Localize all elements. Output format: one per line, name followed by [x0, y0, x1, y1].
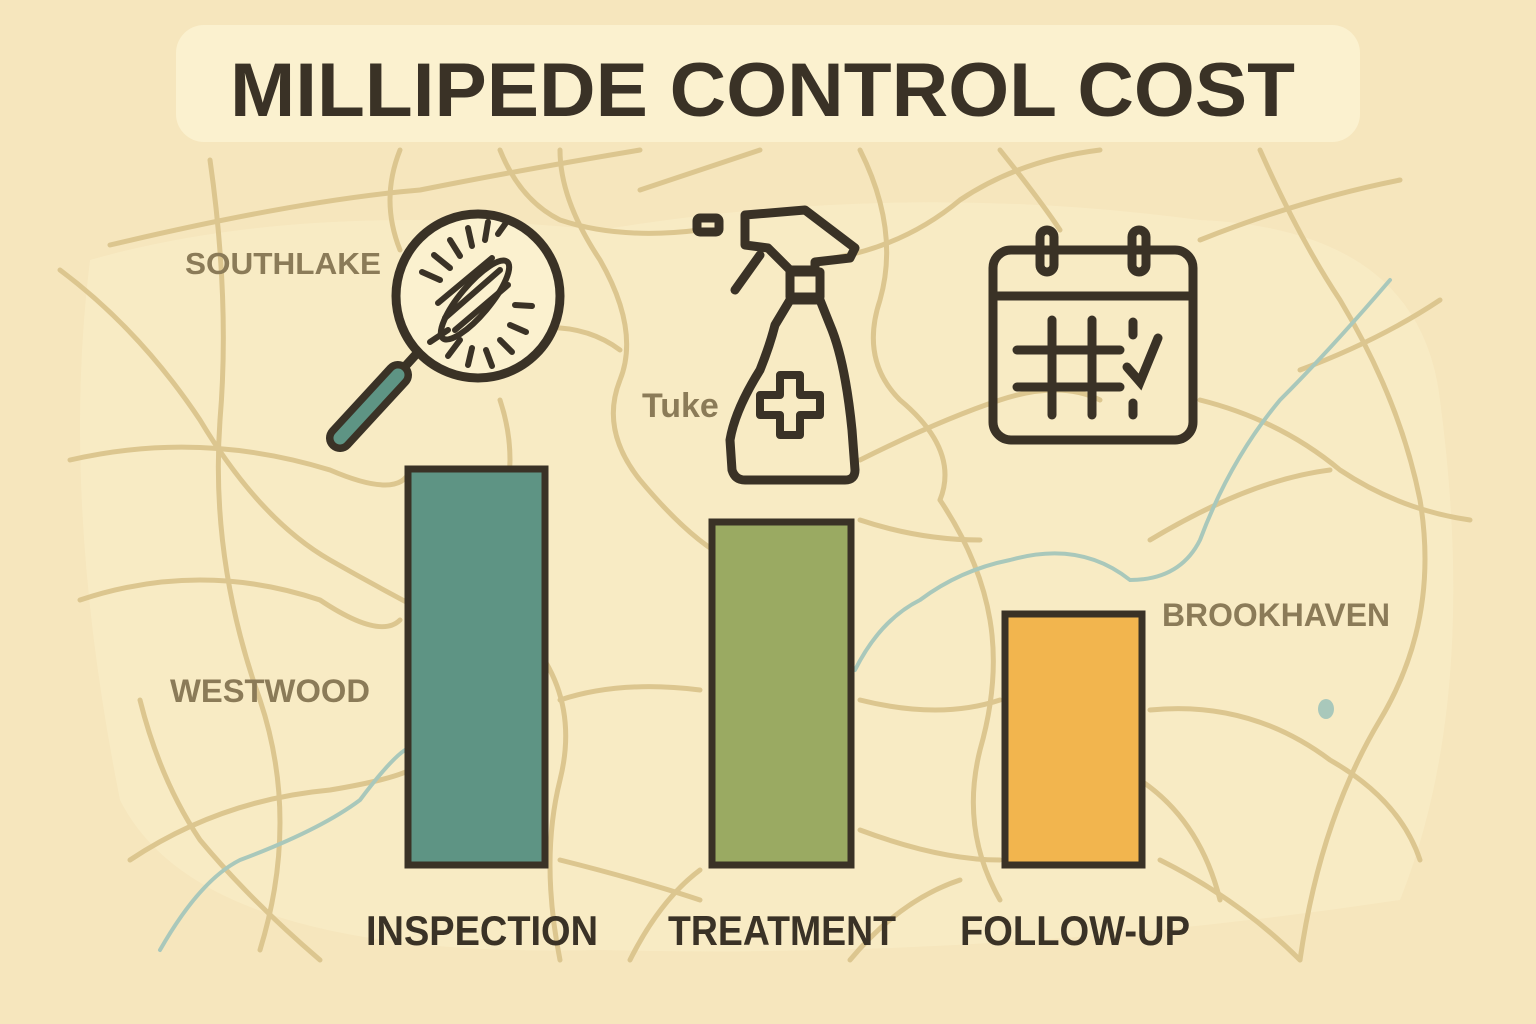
bar: treatment: [712, 522, 851, 865]
icon: magnifier with millipede: [340, 214, 560, 438]
map label: southlake: SOUTHLAKE: [185, 246, 381, 281]
rivers: [160, 280, 1390, 950]
map label: westwood: WESTWOOD: [170, 673, 370, 709]
icon: spray bottle: [697, 210, 855, 480]
label: follow-up: FOLLOW-UP: [960, 907, 1190, 954]
label: inspection: INSPECTION: [366, 907, 598, 954]
icon: calendar: [993, 230, 1193, 440]
label: treatment: TREATMENT: [668, 907, 896, 954]
title: [176, 25, 1360, 142]
title: MILLIPEDE CONTROL COST: [230, 48, 1295, 133]
bar: follow-up: [1005, 614, 1142, 865]
bar: inspection: [408, 469, 545, 865]
map label: brookhaven: BROOKHAVEN: [1162, 597, 1390, 633]
map label: tuke: Tuke: [642, 387, 719, 425]
map background blobs: [80, 202, 1453, 951]
map roads: [60, 150, 1470, 960]
